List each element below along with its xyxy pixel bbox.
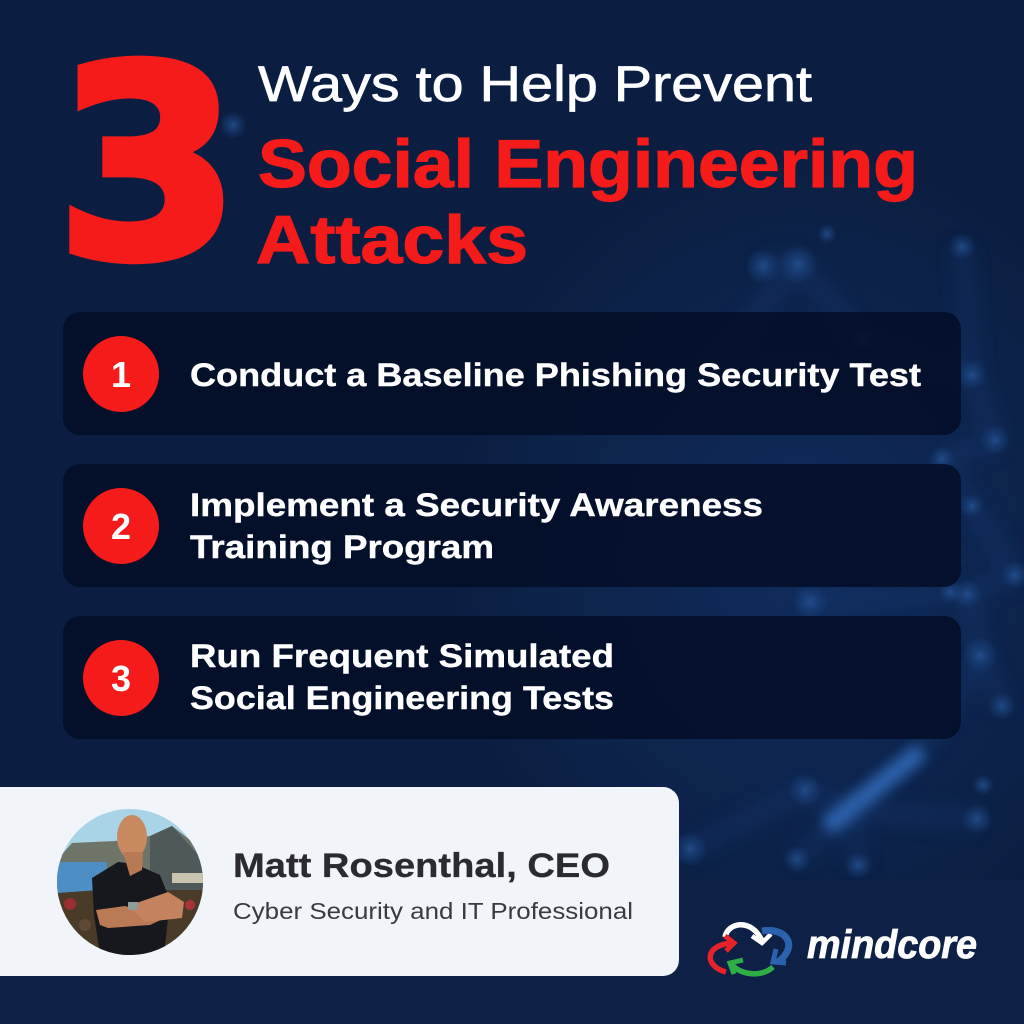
step 3 text xyxy=(190,638,614,716)
logo: mindcore xyxy=(710,923,977,974)
step 1 text: Conduct a Baseline Phishing Security Test xyxy=(190,357,921,393)
panel: step 2 xyxy=(63,464,961,587)
step 1 badge xyxy=(83,336,159,412)
step 2 badge xyxy=(83,488,159,564)
step 2 badge: 2 xyxy=(111,506,131,547)
author name: Matt Rosenthal, CEO xyxy=(233,847,610,885)
step 3 text: Run Frequent Simulated xyxy=(190,638,614,674)
title xyxy=(256,56,918,278)
step 3 text: Social Engineering Tests xyxy=(190,680,614,716)
wordmark: mindcore xyxy=(807,923,977,967)
step 2 text: Training Program xyxy=(190,529,494,565)
title: Social Engineering xyxy=(258,126,918,202)
panel: step 3 xyxy=(63,616,961,739)
big numeral 3: 3 xyxy=(56,12,240,319)
step 3 badge: 3 xyxy=(111,658,131,699)
author photo xyxy=(57,809,203,955)
step 2 text xyxy=(190,487,763,565)
step 2 text: Implement a Security Awareness xyxy=(190,487,763,523)
step 3 badge xyxy=(83,640,159,716)
title: Attacks xyxy=(256,202,528,278)
icon: cloud arrows xyxy=(710,925,789,974)
panel: author card xyxy=(0,787,679,976)
panel: step 1 xyxy=(63,312,961,435)
author role: Cyber Security and IT Professional xyxy=(233,898,633,924)
title: Ways to Help Prevent xyxy=(258,56,812,112)
step 1 badge: 1 xyxy=(111,354,131,395)
